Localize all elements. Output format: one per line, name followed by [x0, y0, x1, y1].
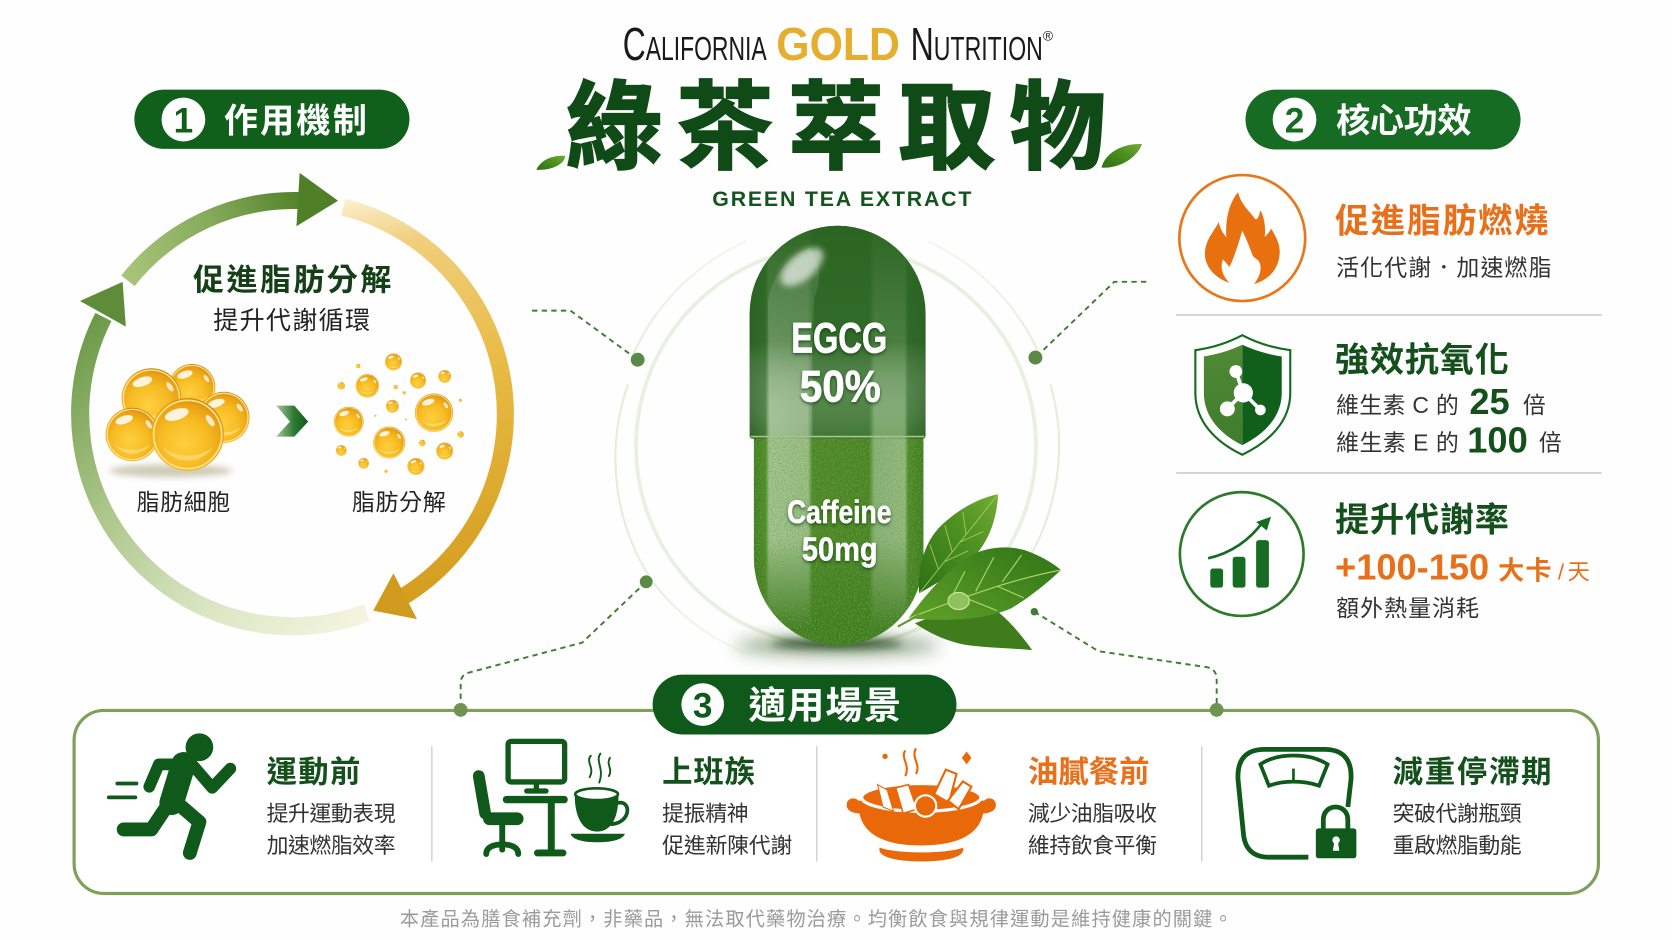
- section pill 3: [653, 675, 956, 734]
- scenario heading: 油膩餐前: [1028, 755, 1150, 789]
- pale green arc arrow: [80, 282, 367, 626]
- benefit text: 活化代謝．加速燃脂: [1336, 254, 1552, 280]
- tea leaves: [898, 494, 1061, 650]
- vitamin C line: 25: [1469, 381, 1510, 422]
- brand logo: CALIFORNIA: [623, 18, 767, 70]
- dashed connector top left: [532, 311, 645, 367]
- benefit heading: 促進脂肪燃燒: [1335, 203, 1548, 241]
- section pill 1: 作用機制: [224, 102, 367, 140]
- calorie figure: /天: [1558, 560, 1590, 585]
- panel node left: [454, 703, 468, 717]
- capsule text caffeine: Caffeine: [787, 494, 891, 530]
- section pill 1: 1: [174, 101, 193, 140]
- fat breakdown droplets: [334, 353, 464, 475]
- middle leaf: [909, 547, 1061, 620]
- connector node: [1031, 608, 1038, 615]
- calorie figure: +100-150: [1335, 547, 1489, 588]
- capsule text 50mg: 50mg: [802, 531, 878, 568]
- capsule text 50 percent: 50%: [800, 361, 881, 411]
- scenario text: 加速燃脂效率: [267, 833, 396, 858]
- vitamin C line: 維生素 C 的: [1336, 392, 1459, 418]
- panel node right: [1210, 703, 1224, 717]
- main title: 綠茶萃取物: [566, 75, 1121, 182]
- water droplet: [948, 592, 969, 610]
- dashed connector bottom right: [1034, 612, 1217, 710]
- scenario text: 提振精神: [662, 801, 749, 826]
- benefit heading: 提升代謝率: [1335, 502, 1509, 540]
- icon: rising bar chart: [1180, 492, 1304, 616]
- connector node: [640, 575, 653, 588]
- cycle subheading: 提升代謝循環: [213, 307, 370, 335]
- top leaf: [919, 494, 998, 594]
- benefit heading: 強效抗氧化: [1335, 341, 1509, 379]
- scenario: greasy meal: [847, 748, 1157, 861]
- scenario text: 維持飲食平衡: [1028, 833, 1157, 858]
- benefit: fat burning: [1179, 175, 1552, 301]
- brand logo: [623, 18, 1053, 70]
- section pill 2: 2: [1285, 101, 1304, 140]
- subtitle: GREEN TEA EXTRACT: [712, 187, 971, 211]
- brand logo: ®: [1043, 28, 1053, 44]
- benefit: antioxidant: [1195, 335, 1562, 461]
- section pill 3: 適用場景: [749, 684, 901, 726]
- scenario heading: 運動前: [267, 755, 360, 789]
- scenario: office workers: [479, 741, 792, 858]
- title leaf right: [1102, 144, 1142, 168]
- capsule upper shell: [750, 226, 926, 439]
- section pill 1: [134, 90, 409, 149]
- mechanism cycle diagram: [80, 173, 505, 626]
- title leaf left: [536, 156, 565, 170]
- scenario: pre-workout: [109, 733, 396, 858]
- scenario text: 突破代謝瓶頸: [1393, 801, 1522, 826]
- vitamin C line: [1336, 381, 1546, 422]
- vitamin E line: [1336, 420, 1562, 461]
- capsule text EGCG: EGCG: [791, 314, 887, 362]
- label fat breakdown: 脂肪分解: [352, 489, 446, 515]
- label fat cell: 脂肪細胞: [136, 489, 230, 515]
- capsule ground shadow: [735, 637, 939, 654]
- section pill 2: 核心功效: [1336, 102, 1472, 140]
- calorie figure: [1335, 547, 1590, 588]
- disclaimer footnote: 本產品為膳食補充劑，非藥品，無法取代藥物治療。均衡飲食與規律運動是維持健康的關鍵。: [400, 909, 1233, 931]
- icon: hot pot bowl: [847, 748, 996, 861]
- dashed connector top right: [1028, 282, 1146, 365]
- bottom leaf: [915, 611, 1032, 650]
- icon: shield molecule: [1195, 335, 1290, 455]
- capsule: [735, 226, 939, 654]
- scenario: weight plateau: [1238, 749, 1552, 858]
- icon: scale with lock: [1238, 749, 1356, 858]
- arrow chevron: [276, 406, 308, 437]
- fat cell cluster: [106, 364, 250, 477]
- dashed connector bottom left: [461, 582, 646, 710]
- scenario heading: 上班族: [662, 755, 755, 789]
- section pill 3: 3: [693, 686, 712, 725]
- capsule lower powder half: [746, 437, 928, 651]
- calorie figure: 大卡: [1498, 556, 1552, 586]
- icon: desk and coffee: [479, 741, 627, 854]
- benefit text: 額外熱量消耗: [1336, 595, 1479, 621]
- gold arc arrow: [343, 207, 505, 619]
- cycle heading: 促進脂肪分解: [193, 262, 391, 297]
- usage scenarios panel: [74, 675, 1598, 893]
- vitamin E line: 100: [1467, 420, 1528, 461]
- brand logo: GOLD: [776, 18, 900, 70]
- scenario text: 減少油脂吸收: [1028, 801, 1157, 826]
- vitamin E line: 維生素 E 的: [1336, 429, 1459, 455]
- vitamin E line: 倍: [1539, 429, 1562, 455]
- brand logo: NUTRITION: [911, 18, 1043, 70]
- vitamin C line: 倍: [1523, 392, 1546, 418]
- icon: flame in circle: [1179, 175, 1305, 301]
- benefit: metabolic rate: [1180, 492, 1590, 621]
- scenario text: 提升運動表現: [267, 801, 396, 826]
- concentric rings: [615, 241, 1059, 653]
- scenario heading: 減重停滯期: [1393, 755, 1552, 789]
- section pill 2: [1245, 90, 1521, 149]
- green arc arrow: [128, 173, 338, 281]
- scenario text: 重啟燃脂動能: [1393, 833, 1522, 858]
- icon: runner: [109, 733, 230, 853]
- scenario text: 促進新陳代謝: [662, 833, 792, 858]
